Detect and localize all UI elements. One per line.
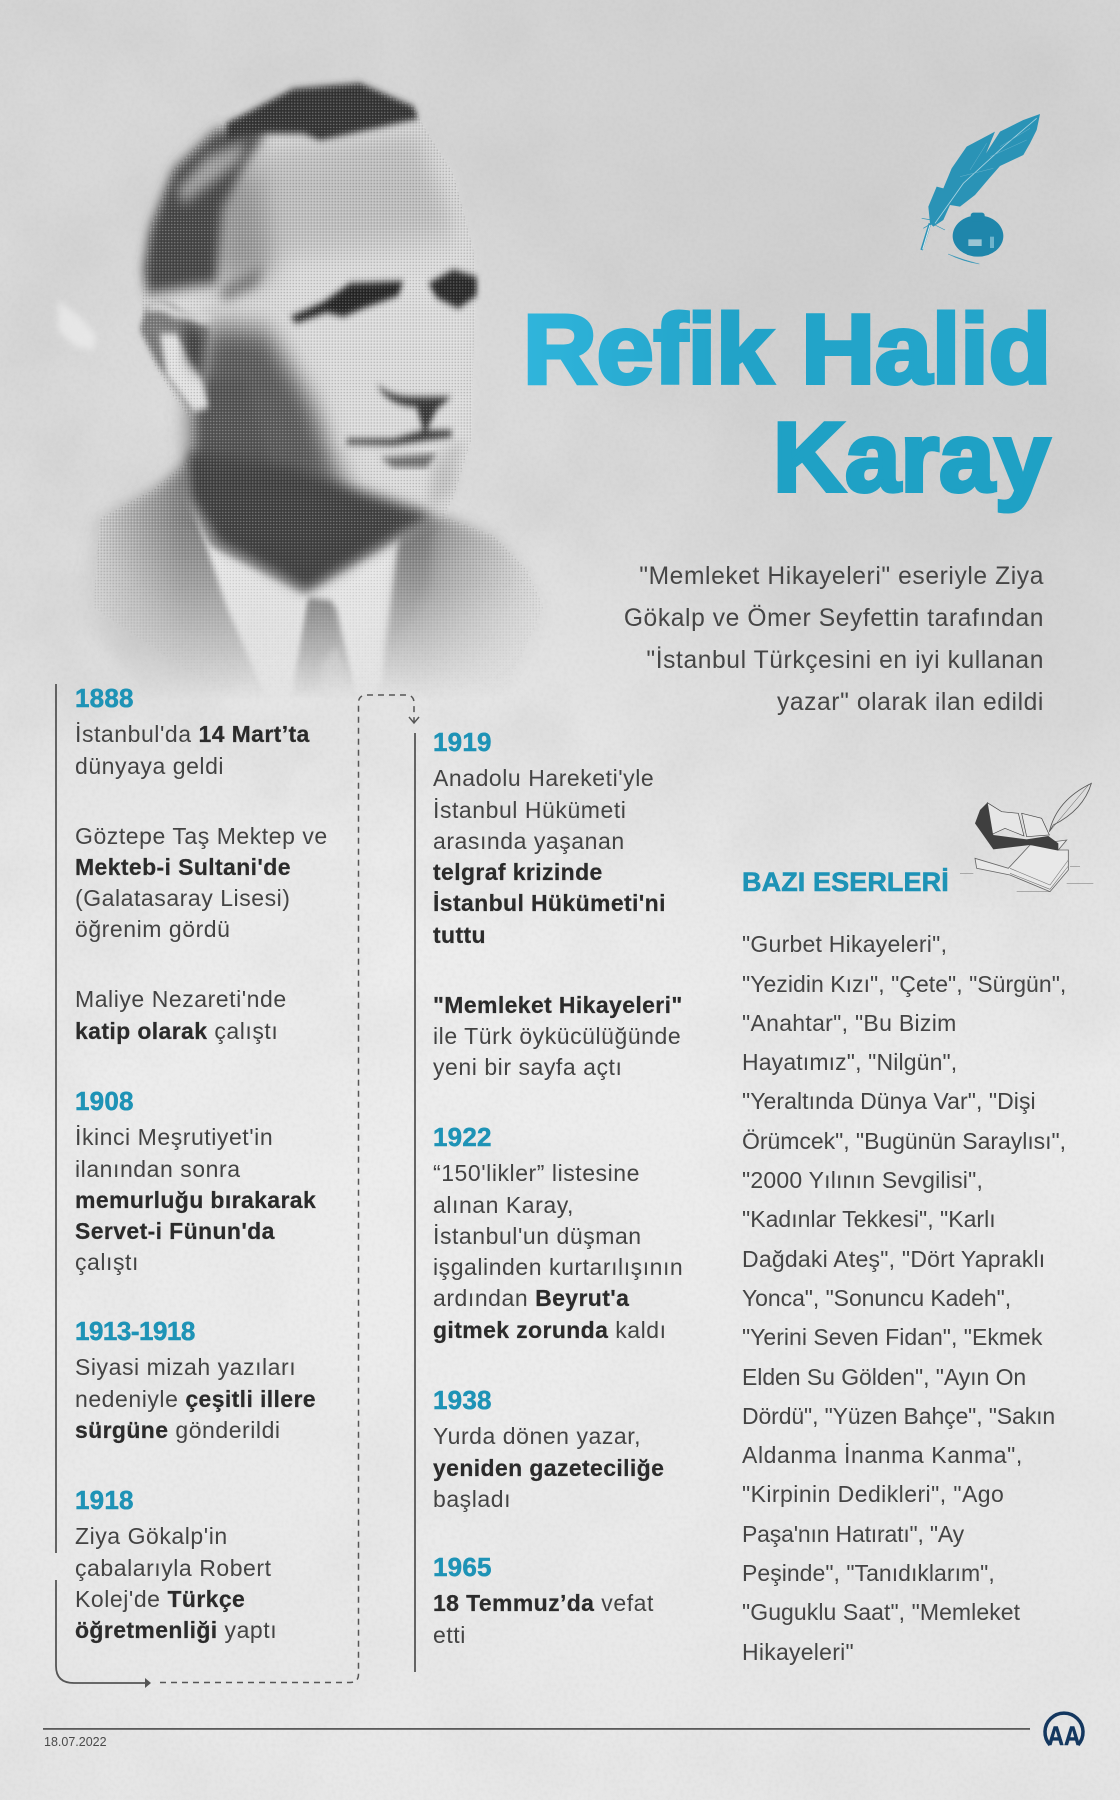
intro quote: Gökalp ve Ömer Seyfettin tarafından	[624, 605, 1044, 632]
entry: 1922: İstanbul'un düşman	[433, 1223, 642, 1249]
entry: 1913-1918: 1913-1918	[75, 1316, 195, 1346]
title: Refik Halid	[523, 294, 1051, 404]
entry: 1919: telgraf krizinde	[433, 859, 603, 885]
entry: 1919: Anadolu Hareketi'yle	[433, 765, 654, 791]
entry: 1888: 1888	[75, 683, 134, 713]
entry: 1908: ilanından sonra	[75, 1156, 241, 1182]
entry: 1908: 1908	[75, 1086, 134, 1116]
timeline column 1	[75, 683, 328, 1644]
entry: 1888	[75, 683, 328, 1044]
entry: 1888: (Galatasaray Lisesi)	[75, 885, 291, 911]
entry: 1918: 1918	[75, 1485, 134, 1515]
entry: 1919: "Memleket Hikayeleri"	[433, 992, 683, 1018]
date: 18.07.2022	[44, 1735, 107, 1749]
timeline connector lines	[55, 684, 420, 1688]
entry: 1965: 18 Temmuz’da vefat	[433, 1590, 654, 1616]
nose and mouth	[347, 384, 452, 445]
entry: 1922: ardından Beyrut'a	[433, 1285, 629, 1311]
entry: 1922	[433, 1122, 683, 1344]
entry: 1908: çalıştı	[75, 1249, 139, 1275]
entry: 1918: Kolej'de Türkçe	[75, 1586, 245, 1612]
list of works: "Kirpinin Dedikleri", "Ago	[742, 1481, 1004, 1507]
eyes and brows	[290, 281, 403, 323]
entry: 1922: alınan Karay,	[433, 1192, 574, 1218]
face base	[160, 115, 477, 591]
list of works: "Yerini Seven Fidan", "Ekmek	[742, 1324, 1042, 1350]
ear	[140, 302, 210, 411]
timeline column 2	[433, 727, 683, 1648]
icon: books and quill	[960, 782, 1094, 892]
list of works: "Yeraltında Dünya Var", "Dişi	[742, 1088, 1036, 1114]
list of works: "Gurbet Hikayeleri",	[742, 931, 947, 957]
entry: 1919: arasında yaşanan	[433, 828, 625, 854]
entry: 1965: etti	[433, 1622, 466, 1648]
entry: 1965: 1965	[433, 1552, 492, 1582]
list of works: Örümcek", "Bugünün Saraylısı",	[742, 1128, 1066, 1154]
heading: works: BAZI ESERLERİ	[742, 867, 949, 897]
list of works: "2000 Yılının Sevgilisi",	[742, 1167, 983, 1193]
entry: 1913-1918	[75, 1316, 316, 1444]
entry: 1919: İstanbul Hükümeti	[433, 797, 626, 823]
entry: 1918	[75, 1485, 277, 1644]
entry: 1919: yeni bir sayfa açtı	[433, 1054, 622, 1080]
footer rule	[43, 1728, 1030, 1730]
intro quote	[624, 563, 1044, 716]
entry: 1888: dünyaya geldi	[75, 753, 224, 779]
list of works: Hayatımız", "Nilgün",	[742, 1049, 957, 1075]
portrait of Refik Halid Karay	[90, 78, 543, 693]
entry: 1913-1918: sürgüne gönderildi	[75, 1417, 281, 1443]
entry: 1919: tuttu	[433, 922, 486, 948]
entry: 1888: katip olarak çalıştı	[75, 1018, 278, 1044]
intro quote: "İstanbul Türkçesini en iyi kullanan	[646, 647, 1044, 674]
entry: 1908: İkinci Meşrutiyet'in	[75, 1124, 273, 1150]
entry: 1938: 1938	[433, 1385, 492, 1415]
entry: 1965	[433, 1552, 654, 1648]
icon: feather and inkwell	[920, 114, 1040, 264]
list of works: Yonca", "Sonuncu Kadeh",	[742, 1285, 1011, 1311]
entry: 1938: yeniden gazeteciliğe	[433, 1455, 664, 1481]
intro quote: "Memleket Hikayeleri" eseriyle Ziya	[639, 563, 1044, 590]
hair	[143, 129, 267, 294]
entry: 1888: Maliye Nezareti'nde	[75, 986, 287, 1012]
entry: 1913-1918: Siyasi mizah yazıları	[75, 1354, 296, 1380]
entry: 1918: Ziya Gökalp'in	[75, 1523, 228, 1549]
intro quote: yazar" olarak ilan edildi	[777, 689, 1044, 716]
list of works	[742, 931, 1066, 1665]
entry: 1938: Yurda dönen yazar,	[433, 1423, 641, 1449]
entry: 1908: memurluğu bırakarak	[75, 1187, 316, 1213]
list of works: Aldanma İnanma Kanma",	[742, 1442, 1023, 1468]
list of works: Elden Su Gölden", "Ayın On	[742, 1364, 1026, 1390]
entry: 1919	[433, 727, 683, 1080]
entry: 1919: 1919	[433, 727, 492, 757]
entry: 1938	[433, 1385, 664, 1512]
list of works: "Anahtar", "Bu Bizim	[742, 1010, 957, 1036]
entry: 1888: öğrenim gördü	[75, 916, 230, 942]
list of works: "Guguklu Saat", "Memleket	[742, 1599, 1020, 1625]
list of works: Dağdaki Ateş", "Dört Yapraklı	[742, 1246, 1045, 1272]
entry: 1922: işgalinden kurtarılışının	[433, 1254, 683, 1280]
entry: 1908: Servet-i Fünun'da	[75, 1218, 275, 1244]
entry: 1888: Mekteb-i Sultani'de	[75, 854, 291, 880]
list of works: "Kadınlar Tekkesi", "Karlı	[742, 1206, 996, 1232]
list of works: "Yezidin Kızı", "Çete", "Sürgün",	[742, 971, 1066, 997]
halftone	[94, 83, 543, 666]
title: Karay	[773, 402, 1050, 512]
entry: 1919: ile Türk öykücülüğünde	[433, 1023, 681, 1049]
entry: 1918: öğretmenliği yaptı	[75, 1617, 277, 1643]
entry: 1922: “150'likler” listesine	[433, 1160, 640, 1186]
entry: 1888: İstanbul'da 14 Mart’ta	[75, 721, 310, 747]
entry: 1888: Göztepe Taş Mektep ve	[75, 823, 328, 849]
entry: 1922: 1922	[433, 1122, 492, 1152]
entry: 1919: İstanbul Hükümeti'ni	[433, 890, 666, 916]
list of works: Peşinde", "Tanıdıklarım",	[742, 1560, 995, 1586]
entry: 1908	[75, 1086, 316, 1275]
entry: 1922: gitmek zorunda kaldı	[433, 1317, 667, 1343]
entry: 1938: başladı	[433, 1486, 511, 1512]
entry: 1918: çabalarıyla Robert	[75, 1555, 272, 1581]
title	[523, 294, 1052, 514]
list of works: Dördü", "Yüzen Bahçe", "Sakın	[742, 1403, 1055, 1429]
list of works: Paşa'nın Hatıratı", "Ay	[742, 1521, 964, 1547]
list of works: Hikayeleri"	[742, 1639, 854, 1665]
logo: AA	[1043, 1711, 1085, 1750]
entry: 1913-1918: nedeniyle çeşitli illere	[75, 1386, 316, 1412]
